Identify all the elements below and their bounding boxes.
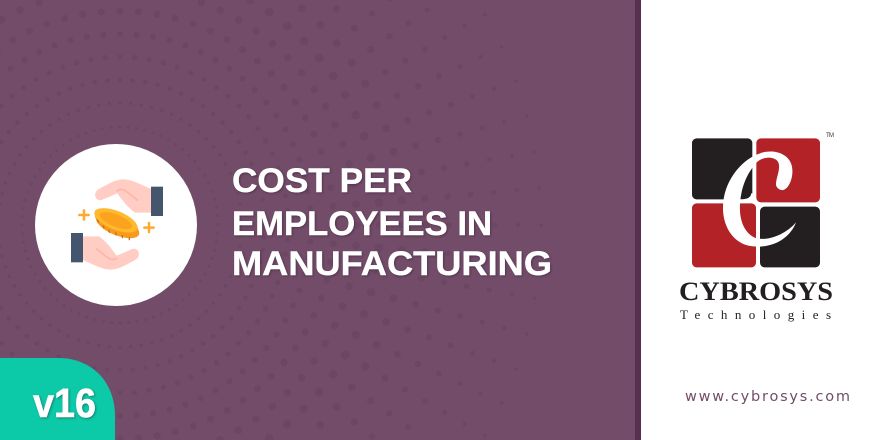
coin edge ticks bbox=[98, 220, 129, 240]
icon artwork bbox=[71, 179, 163, 270]
plus sign right bbox=[144, 223, 154, 232]
sidebar edge stripe bbox=[635, 0, 641, 440]
title: EMPLOYEES IN bbox=[232, 205, 492, 243]
upper hand bbox=[95, 179, 163, 216]
panel: purple background bbox=[0, 0, 635, 440]
logo mark bbox=[692, 138, 820, 267]
title: MANUFACTURING bbox=[232, 245, 552, 283]
plus sign left bbox=[79, 210, 89, 220]
version badge bbox=[0, 358, 115, 440]
logo: Cybrosys Technologies bbox=[679, 133, 834, 322]
icon background circle bbox=[35, 144, 197, 306]
icon: hands holding coin bbox=[35, 144, 197, 306]
title: COST PER bbox=[232, 162, 412, 200]
company subtitle: Technologies bbox=[680, 307, 831, 322]
website: www.cybrosys.com bbox=[685, 389, 850, 405]
lower hand bbox=[71, 233, 139, 270]
coin bbox=[91, 203, 142, 243]
trademark: TM bbox=[826, 133, 834, 139]
title bbox=[232, 162, 552, 283]
version label: v16 bbox=[33, 380, 96, 426]
company name: CYBROSYS bbox=[679, 277, 833, 306]
